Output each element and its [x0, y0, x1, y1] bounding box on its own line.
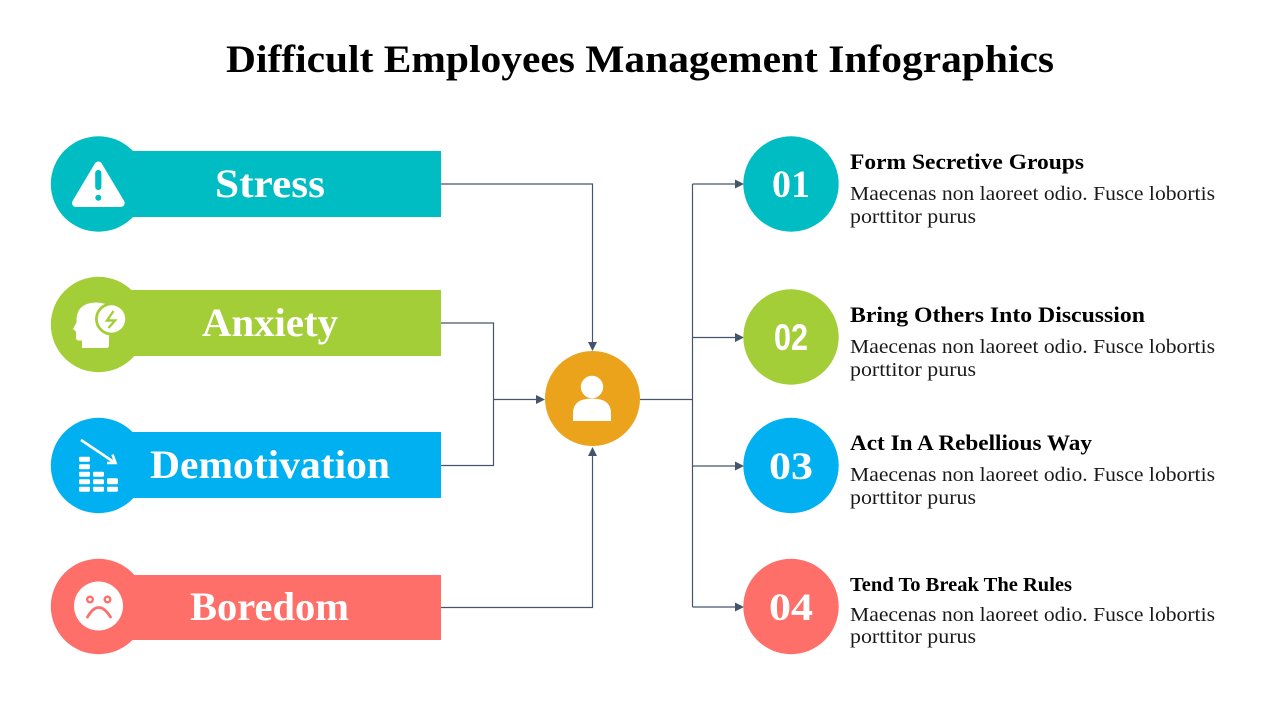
icon: warning triangle	[76, 166, 121, 203]
body 04: Maecenas non laoreet odio. Fusce lobortis	[850, 604, 1215, 626]
item 01: 01	[772, 163, 810, 206]
item 03	[743, 418, 1215, 513]
icon: declining bars	[79, 440, 118, 492]
panel: stress	[51, 136, 441, 232]
item 04: 04	[769, 586, 813, 629]
label: stress: Stress	[215, 161, 325, 206]
body 03	[850, 464, 1215, 509]
heading 02: Bring Others Into Discussion	[850, 302, 1145, 327]
panel: demotivation	[51, 418, 441, 513]
item 04	[743, 559, 1215, 654]
label: boredom: Boredom	[190, 584, 349, 629]
connector: center to outcomes	[640, 180, 744, 612]
body 03: Maecenas non laoreet odio. Fusce lobortis	[850, 464, 1215, 486]
connector: stress to center	[441, 184, 597, 351]
icon: sad face	[74, 582, 123, 630]
panel: boredom	[51, 559, 441, 654]
center circle with person icon	[545, 351, 640, 446]
label: anxiety: Anxiety	[202, 300, 338, 345]
heading 01: Form Secretive Groups	[850, 149, 1084, 174]
connector: boredom to center	[441, 447, 597, 608]
body 04	[850, 604, 1215, 648]
heading 03: Act In A Rebellious Way	[850, 430, 1092, 455]
item 02: 02	[774, 317, 808, 358]
body 04: porttitor purus	[850, 626, 976, 648]
body 02	[850, 336, 1215, 381]
panel: anxiety	[51, 277, 441, 372]
label: demotivation: Demotivation	[150, 442, 390, 487]
body 02: porttitor purus	[850, 359, 976, 381]
body 02: Maecenas non laoreet odio. Fusce lobortis	[850, 336, 1215, 358]
item 02	[743, 289, 1215, 385]
item 03: 03	[769, 445, 813, 488]
body 01: porttitor purus	[850, 206, 976, 228]
body 01: Maecenas non laoreet odio. Fusce lobortis	[850, 183, 1215, 205]
body 01	[850, 183, 1215, 228]
title: Difficult Employees Management Infographics	[226, 38, 1054, 81]
connector: anxiety and demotivation to center	[441, 323, 545, 466]
icon: head with lightning	[73, 302, 128, 348]
item 01	[743, 136, 1215, 232]
heading 04: Tend To Break The Rules	[850, 574, 1072, 596]
body 03: porttitor purus	[850, 487, 976, 509]
